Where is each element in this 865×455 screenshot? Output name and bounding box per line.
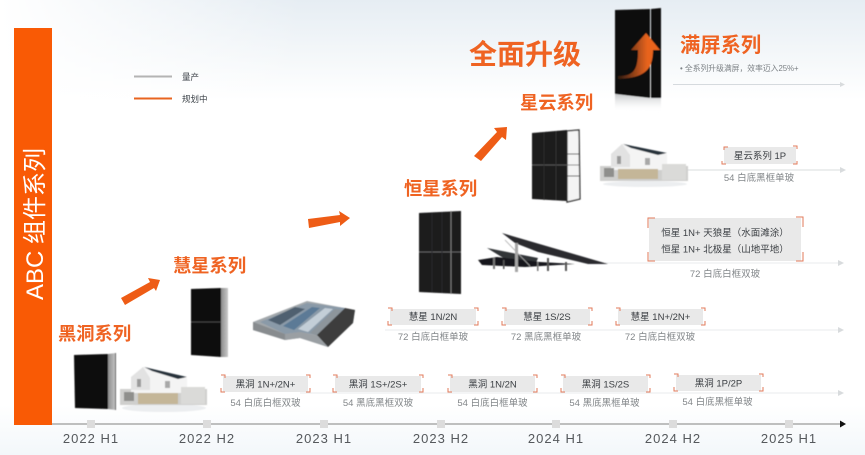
chip: 黑洞 1S/2S: 黑洞 1S/2S	[582, 380, 629, 390]
timeline axis: 2024 H2	[645, 431, 701, 446]
full-screen series note: • 全系列升级满屏，效率迈入25%+	[680, 63, 799, 73]
chip: 星云系列 1P: 星云系列 1P	[734, 150, 786, 162]
chip: 黑洞 1N/2N	[448, 375, 537, 392]
legend	[134, 72, 208, 104]
spec: 54 黑底黑框单玻: 54 黑底黑框单玻	[569, 397, 640, 409]
timeline axis: 2025 H1	[761, 431, 817, 446]
arrow: 慧星 to 恒星	[308, 211, 350, 228]
vertical title bar: ABC 组件系列: ABC 组件系列	[22, 148, 49, 300]
chip: 慧星 1N/2N: 慧星 1N/2N	[409, 311, 457, 323]
illustration: cell cross-section	[253, 301, 355, 347]
chip: 恒星 1N+ 天狼星 / 北极星: 恒星 1N+ 北极星（山地平地）	[661, 244, 789, 256]
arrow: 黑洞 to 慧星	[121, 278, 160, 305]
vertical title bar: ABC 组件系列	[14, 28, 52, 425]
timeline axis: 2024 H1	[528, 431, 584, 446]
illustration: ground-mounted array	[478, 233, 608, 272]
panel: 恒星 module	[419, 211, 461, 294]
chip: 恒星 1N+ 天狼星 / 北极星: 恒星 1N+ 天狼星（水面滩涂）	[661, 227, 789, 239]
series heading: 星云系列: 星云系列	[520, 92, 593, 113]
chip: 慧星 1S/2S: 慧星 1S/2S	[523, 311, 571, 323]
chip: 黑洞 1S+/2S+: 黑洞 1S+/2S+	[349, 380, 408, 390]
timeline axis: 2023 H1	[296, 431, 352, 446]
chip: 慧星 1S/2S	[502, 308, 592, 325]
chip: 黑洞 1N+/2N+: 黑洞 1N+/2N+	[236, 380, 296, 390]
panel: 黑洞 module	[74, 353, 116, 410]
chip: 慧星 1N/2N	[388, 308, 478, 325]
illustration: house with rooftop solar (星云)	[600, 144, 688, 187]
spec: 72 白底白框双玻 (恒星): 72 白底白框双玻	[690, 268, 761, 280]
timeline axis: 2023 H2	[413, 431, 469, 446]
chip: 慧星 1N+/2N+	[616, 308, 705, 325]
legend item: mass production: 量产	[182, 72, 199, 82]
spec: 54 白底黑框单玻: 54 白底黑框单玻	[682, 396, 753, 408]
series heading: 黑洞系列: 黑洞系列	[58, 323, 131, 344]
chip: 星云系列 1P	[722, 146, 797, 164]
spec: 72 黑底黑框单玻: 72 黑底黑框单玻	[511, 331, 582, 343]
legend item: planned: 规划中	[182, 94, 208, 104]
series heading: 慧星系列: 慧星系列	[173, 255, 246, 276]
row lines	[300, 82, 846, 396]
chip: 黑洞 1N+/2N+	[221, 375, 310, 392]
timeline axis	[52, 420, 846, 446]
panel: 星云 module	[532, 130, 580, 202]
chip: 黑洞 1P/2P	[674, 374, 763, 391]
illustration: house with rooftop solar	[120, 367, 207, 412]
series heading: 满屏系列: 满屏系列	[680, 34, 761, 57]
series heading: 恒星系列: 恒星系列	[404, 178, 477, 199]
chip: 黑洞 1S+/2S+	[333, 375, 423, 392]
spec: 72 白底白框双玻: 72 白底白框双玻	[625, 331, 696, 343]
timeline axis: 2022 H2	[179, 431, 235, 446]
spec: 54 黑底黑框双玻: 54 黑底黑框双玻	[343, 397, 414, 409]
chip: 黑洞 1N/2N: 黑洞 1N/2N	[468, 380, 517, 390]
chip: 恒星 1N+ 天狼星 / 北极星	[648, 217, 803, 261]
headline: 全面升级: 全面升级	[469, 39, 581, 70]
spec: 54 白底白框单玻: 54 白底白框单玻	[457, 397, 528, 409]
chip: 慧星 1N+/2N+: 慧星 1N+/2N+	[631, 311, 691, 323]
spec: 54 白底白框双玻: 54 白底白框双玻	[230, 397, 301, 409]
panel: 满屏 module with upgrade arrow	[615, 8, 661, 112]
chip: 黑洞 1S/2S	[561, 375, 650, 392]
timeline axis: 2022 H1	[63, 431, 119, 446]
spec: 54 白底黑框单玻 (星云): 54 白底黑框单玻	[724, 172, 795, 184]
panel: 慧星 module	[191, 288, 228, 357]
chip: 黑洞 1P/2P: 黑洞 1P/2P	[695, 378, 742, 390]
arrow: 恒星 to 星云	[474, 127, 507, 161]
spec: 72 白底白框单玻: 72 白底白框单玻	[398, 331, 469, 343]
